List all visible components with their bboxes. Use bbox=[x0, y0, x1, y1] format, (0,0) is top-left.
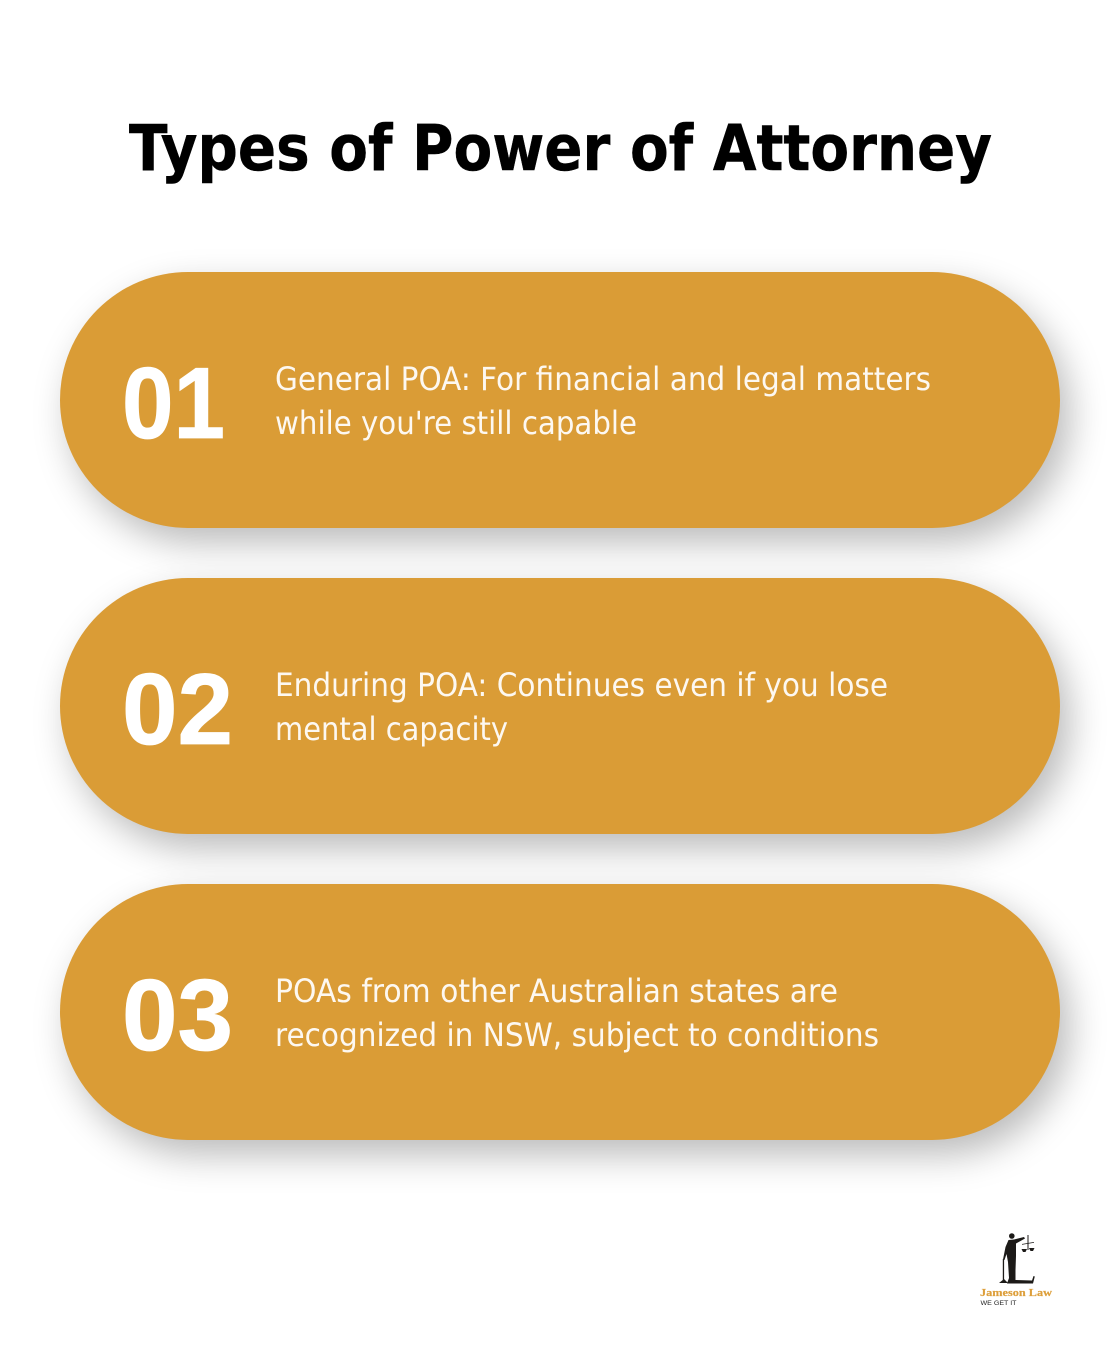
number 01: 01 bbox=[122, 348, 225, 460]
card 02 description bbox=[275, 666, 888, 748]
logo: Jameson Law bbox=[980, 1233, 1052, 1307]
card 02 description: mental capacity bbox=[275, 710, 508, 748]
card 01 description: while you're still capable bbox=[275, 404, 637, 442]
number 03: 03 bbox=[122, 960, 233, 1072]
card 01 description bbox=[275, 360, 931, 442]
card 03 content bbox=[122, 960, 879, 1072]
logo wordmark: Jameson Law bbox=[980, 1288, 1052, 1299]
card 03 description: POAs from other Australian states are bbox=[275, 972, 838, 1010]
card 02 description: Enduring POA: Continues even if you lose bbox=[275, 666, 888, 704]
panel: card 02 background bbox=[60, 578, 1060, 834]
title: Types of Power of Attorney bbox=[129, 112, 992, 185]
card 01 content bbox=[122, 348, 931, 460]
card 03 description bbox=[275, 972, 879, 1054]
panel: card 03 background bbox=[60, 884, 1060, 1140]
logo tagline: WE GET IT bbox=[980, 1300, 1017, 1307]
panel: card 01 background bbox=[60, 272, 1060, 528]
number 02: 02 bbox=[122, 654, 233, 766]
card 03 description: recognized in NSW, subject to conditions bbox=[275, 1016, 879, 1054]
icon: lady justice with L bbox=[999, 1233, 1035, 1284]
card 02 content bbox=[122, 654, 888, 766]
card 01 description: General POA: For financial and legal matters bbox=[275, 360, 931, 398]
